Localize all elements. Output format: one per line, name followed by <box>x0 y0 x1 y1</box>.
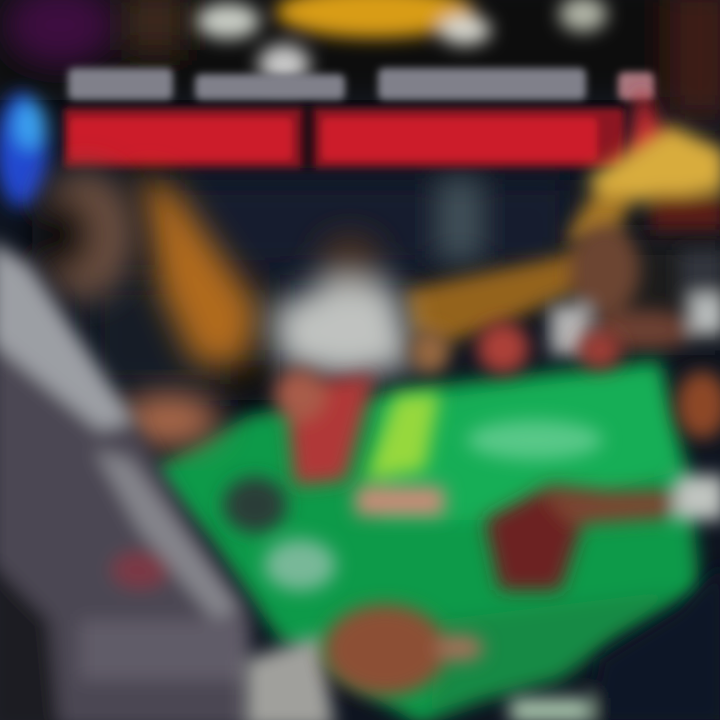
foreground hand <box>323 604 484 696</box>
right hand on table <box>485 371 720 590</box>
right arm reaching <box>405 250 600 345</box>
table markings <box>223 392 603 591</box>
left arm raised <box>140 175 260 365</box>
background: upper room <box>0 0 720 400</box>
gray suit left foreground <box>0 240 250 720</box>
banner: gray lettering <box>68 68 654 100</box>
right player <box>550 225 720 355</box>
yellow sign <box>275 0 475 38</box>
white cuff <box>245 635 335 720</box>
blue light <box>0 92 48 208</box>
dark sleeve bottom right <box>510 560 720 720</box>
banner: red band <box>64 106 624 168</box>
centre player <box>270 234 415 380</box>
left player's hand <box>120 392 220 448</box>
red pennant <box>625 85 672 170</box>
centre player's hands and red cards <box>274 322 622 485</box>
top sign lights <box>196 0 607 84</box>
straw hat <box>565 125 720 245</box>
left player head <box>32 170 135 300</box>
green poker table <box>150 360 700 720</box>
